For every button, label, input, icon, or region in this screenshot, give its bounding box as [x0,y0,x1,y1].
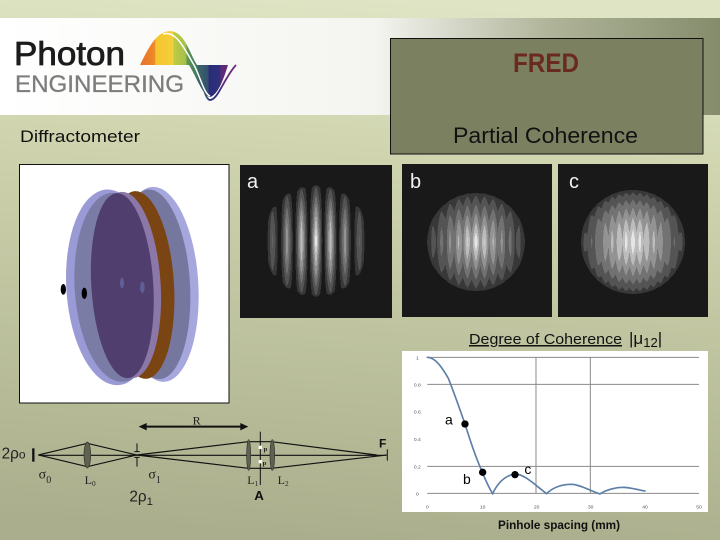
label a: a [247,171,259,193]
fringes a [240,165,392,318]
fringes c [558,164,708,317]
subtitle: Partial Coherence: Partial Coherence [453,123,638,148]
label sigma 0: σ [39,467,46,482]
marker c: c [524,461,531,477]
lens L2 [270,440,275,470]
axis tick labels: 30 [588,505,594,511]
label b: b [410,171,421,193]
axis tick labels: 0.2 [414,464,421,470]
heading: Degree of Coherence: | [658,329,662,348]
heading: Degree of Coherence: 12 [643,335,658,350]
axis tick labels [414,355,702,511]
rays and optical axis [38,442,387,468]
label L0: 0 [92,479,96,488]
line chart: degree of coherence vs pinhole spacing [402,351,708,512]
label L0: L [85,473,92,487]
arrow: R [139,423,248,430]
marker a [445,412,469,428]
pinhole screen: p [263,460,267,467]
label R: R [193,414,201,428]
label F: F [379,437,386,451]
panel: fringe image b [402,164,552,317]
aperture sigma 1 [134,443,140,467]
axis tick labels: 0.8 [414,382,421,388]
pinhole screen: p [264,446,268,453]
logo: Photon Engineering [14,32,236,100]
marker a: a [445,412,453,428]
title: FRED: FRED [513,48,579,78]
source slit [30,448,37,462]
fringes b [402,164,552,317]
axis tick labels: 0 [416,491,419,497]
FRED title box [390,38,703,154]
label 2 rho 1: 1 [147,496,153,508]
3D discs [60,184,204,388]
panel: fringe image c [558,164,708,317]
focal plane [386,449,389,461]
heading: Degree of Coherence [469,329,662,350]
label sigma 1: 1 [156,475,161,486]
optical schematic [2,414,387,508]
axis tick labels: 0.6 [414,410,421,416]
axis tick labels: 20 [534,505,540,511]
axis tick labels: 50 [696,505,702,511]
label 2 rho 1: 2ρ [129,489,147,506]
header band [0,18,720,115]
panel: diffractometer 3D model [20,164,229,403]
panel: fringe image a [240,165,392,318]
axis tick labels: 0 [426,505,429,511]
logo wordmark: ENGINEERING [15,71,184,98]
label L1: L [247,473,255,487]
label 2 rho o: 2ρo [2,445,26,462]
marker b: b [463,471,471,487]
axis tick labels: 40 [642,505,648,511]
label L1: 1 [255,479,259,488]
lens L0 [84,442,91,468]
pinhole screen [259,432,268,485]
icon: rainbow sine wave [141,32,236,100]
heading: Degree of Coherence: |μ [629,329,643,348]
curve [427,357,645,494]
marker c [511,461,531,478]
label A: A [254,488,264,503]
axis tick labels: 10 [480,505,486,511]
marker b [463,469,486,487]
label L2: L [278,473,285,487]
axis label: Pinhole spacing: Pinhole spacing (mm) [498,518,620,532]
label L2: 2 [285,479,289,488]
label c: c [569,171,579,193]
axis tick labels: 0.4 [414,437,421,443]
label sigma 1: σ [148,467,156,482]
heading: Degree of Coherence: Degree of Coherence [469,331,622,348]
label sigma 0: 0 [46,475,51,486]
heading: Diffractometer: Diffractometer [20,127,140,146]
axis tick labels: 1 [416,355,419,361]
logo wordmark: Photon [14,35,125,72]
lens L1 [247,440,251,470]
logo wordmark [14,35,184,98]
